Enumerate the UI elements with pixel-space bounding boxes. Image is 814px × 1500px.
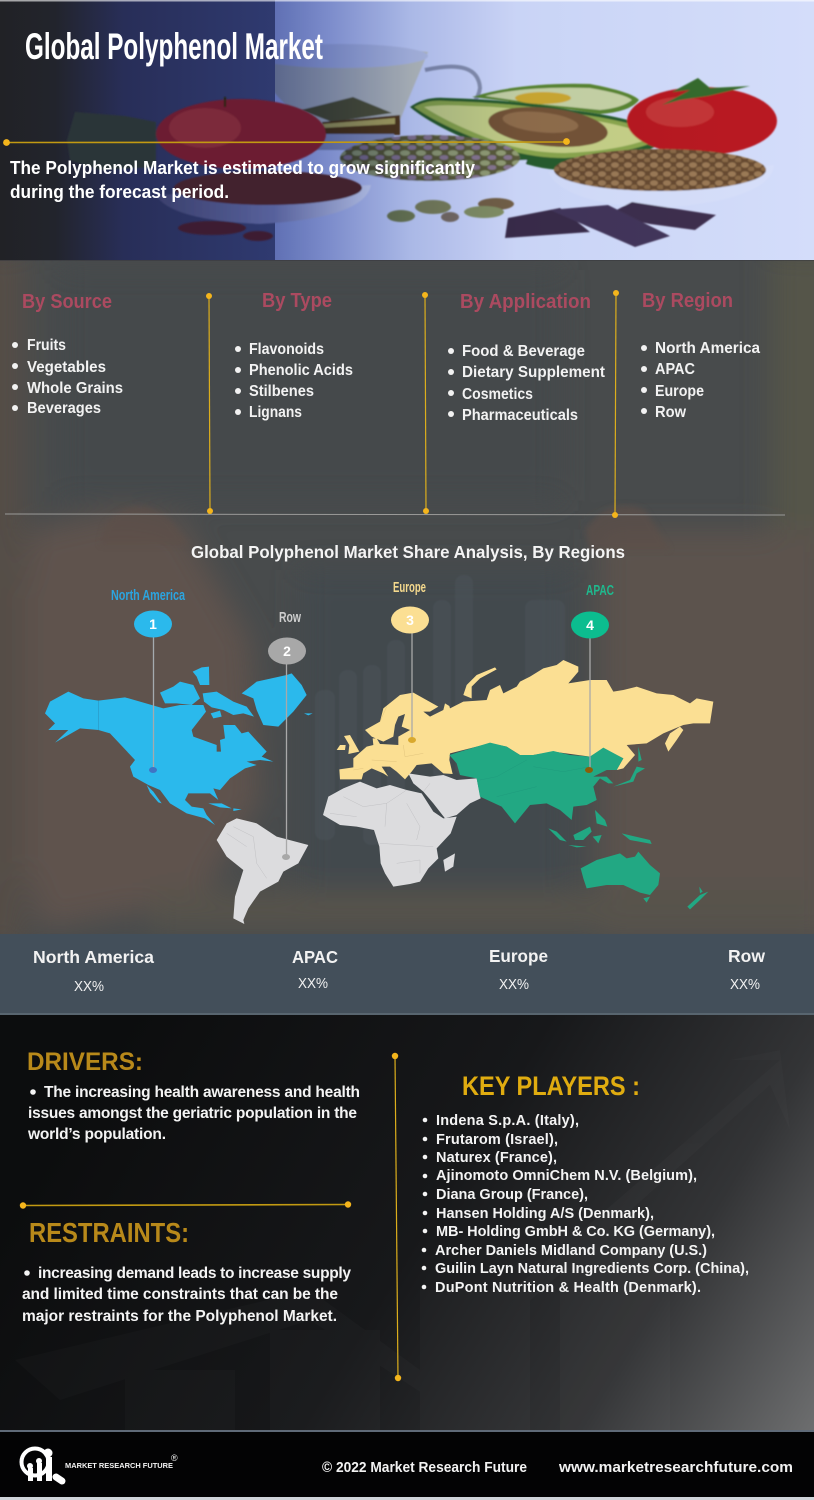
label: north america: North America [111,588,186,604]
list: key players: Guilin Layn Natural Ingredients Corp. (China), [435,1261,749,1277]
berries bowl [156,185,371,224]
list: applications [448,343,605,424]
avocado back [472,84,639,114]
text: drivers: world’s population. [27,1126,166,1143]
green leaves [67,112,156,170]
marker: europe: 3 [406,612,414,628]
heading: restraints: RESTRAINTS: [29,1217,189,1248]
text: restraints: and limited time constraints that can be the [22,1286,338,1303]
map: world regions [45,660,713,924]
divider: restraints [20,1201,351,1209]
hero description: The Polyphenol Market is estimated to grow significantly [10,158,475,178]
apple [156,99,326,169]
heading: by type: By Type [262,289,332,312]
marker: row [268,609,306,860]
stat: row [728,946,765,993]
list: applications: Food & Beverage [462,343,585,360]
list: key players: Diana Group (France), [436,1187,588,1203]
stat: row: XX% [730,976,760,993]
stat: row: Row [728,946,765,966]
list: key players: Archer Daniels Midland Company (U.S.) [435,1243,707,1259]
list: regions: Europe [655,383,704,400]
list: regions [641,340,760,421]
list: types: Stilbenes [249,383,314,400]
text: restraints [22,1265,351,1325]
list: key players: Ajinomoto OmniChem N.V. (Belgium), [436,1168,697,1184]
marker: apac: 4 [586,617,594,633]
list: types [235,341,353,421]
title: Global Polyphenol Market [25,26,323,67]
pistachio bowl [352,158,528,182]
stat: europe [489,946,548,993]
text: copyright: © 2022 Market Research Future [322,1459,527,1476]
text: registered mark: ® [171,1453,178,1463]
stat: north america: North America [33,947,154,967]
panel: hero banner [0,0,814,260]
list: types: Flavonoids [249,341,324,358]
text: restraints: increasing demand leads to increase supply [38,1265,351,1282]
hero description [10,158,475,202]
lentil bowl [548,165,774,208]
text: drivers: The increasing health awareness and health [44,1084,360,1101]
chocolate bars [607,202,716,230]
stat: apac: XX% [298,975,328,992]
list: key players: Naturex (France), [436,1150,557,1166]
panel: by source [12,290,123,417]
heading: market share analysis: Global Polyphenol Market Share Analysis, By Regions [191,542,625,562]
list: key players: DuPont Nutrition & Health (Denmark). [435,1280,701,1296]
map: europe and russia [337,660,713,779]
list: regions: APAC [655,361,695,378]
list: sources: Vegetables [27,359,106,376]
hero divider with dots [3,138,570,146]
marker: row: 2 [283,643,291,659]
text: drivers [27,1084,360,1143]
heading: by application: By Application [460,290,591,313]
panel: by application [448,290,605,424]
panel: regional shares strip [0,934,814,1015]
stat: apac [292,947,338,992]
cup of tea [275,51,428,124]
list: sources: Whole Grains [27,380,123,397]
list: types: Lignans [249,404,302,421]
dried berries [178,221,246,235]
list: sources [12,337,123,417]
blurred fingers [587,506,651,548]
list: key players: Indena S.p.A. (Italy), [436,1113,579,1129]
marker: europe [391,580,429,743]
list: sources: Beverages [27,400,101,417]
food photo illustration [254,44,777,247]
stat: north america [33,947,154,995]
heading: by region: By Region [642,289,733,312]
heading: drivers: DRIVERS: [27,1048,143,1076]
label: apac: APAC [586,583,614,599]
text: drivers: issues amongst the geriatric population in the [28,1105,357,1122]
list: sources: Fruits [27,337,66,354]
tomato [627,87,777,155]
divider: vertical [392,1053,401,1381]
faint background arrow chart [15,1050,790,1432]
list: regions: Row [655,404,687,421]
list: regions: North America [655,340,760,357]
hero description: during the forecast period. [10,182,229,202]
list: applications: Cosmetics [462,386,533,403]
list: types: Phenolic Acids [249,362,353,379]
avocado front [410,98,672,170]
list: applications: Dietary Supplement [462,364,605,381]
label: europe: Europe [393,580,426,596]
stat: apac: APAC [292,947,338,967]
blurred background photo [0,250,814,950]
blurred background bars [315,575,565,845]
list: key players: Hansen Holding A/S (Denmark), [436,1206,654,1222]
icon: market research future logo [22,1448,62,1481]
text: restraints: major restraints for the Polyphenol Market. [22,1308,337,1325]
label: row: Row [279,609,301,626]
panel: segmentation and map background [0,260,814,934]
heading: key players: KEY PLAYERS : [462,1071,640,1101]
heading: by source: By Source [22,290,112,313]
list: key players: MB- Holding GmbH & Co. KG (Germany), [436,1224,715,1240]
stat: europe: Europe [489,946,548,966]
list: key players [422,1113,749,1296]
marker: north america: 1 [149,616,157,632]
map: south america and africa [217,773,481,924]
panel: drivers restraints and key players [0,1015,814,1432]
marker: north america [111,588,186,773]
map: north america [45,667,313,825]
marker: apac [571,583,614,773]
text: website: www.marketresearchfuture.com [558,1459,793,1476]
text: company name: MARKET RESEARCH FUTURE [65,1461,173,1470]
panel: by type [235,289,353,421]
footer bar [0,1430,814,1500]
panel: by region [641,289,760,421]
loose pistachios [387,198,514,222]
stat: europe: XX% [499,976,529,993]
list: key players: Frutarom (Israel), [436,1132,558,1148]
dried berries in bowl [174,171,362,205]
stat: north america: XX% [74,978,104,995]
list: applications: Pharmaceuticals [462,407,578,424]
map: asia pacific [449,743,708,909]
